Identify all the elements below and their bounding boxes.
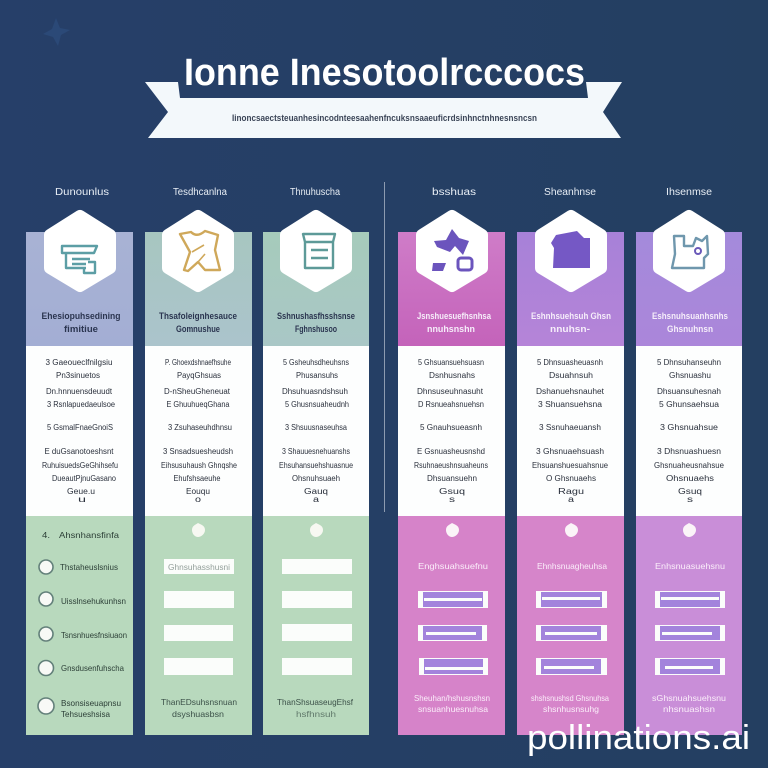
body text: D-nSheuGheneuat [164,387,231,396]
title: Ionne Inesotoolrcccocs [184,52,585,94]
hexagon badge [422,216,482,286]
checklist: Uisslnsehukunhsn [61,596,126,606]
hexagon badge [168,216,228,286]
hexagon badge [286,216,346,286]
body text: 5 Ghusnsuaheudnh [285,400,349,409]
white bars [282,559,352,675]
band text: Sshnushasfhsshsnse [277,311,355,321]
footer note: snsuanhuesnuhsa [418,704,488,714]
body panel [517,346,624,516]
title banner [145,52,622,138]
body text: s [687,495,693,504]
body panel [636,346,742,516]
body panel [398,346,505,516]
bars panel [263,516,369,735]
body text: 3 Ssnuhaeuansh [539,423,601,432]
body text: Ehsuanshuesuahsnue [532,461,609,470]
icon: shield [310,523,323,537]
body text: Eihsusuhaush Ghnqshe [161,461,237,470]
band text: Eshsnuhsuanhsnhs [652,311,728,321]
body text: Ehsuhansuehshuasnue [279,461,353,470]
footer note [277,697,354,719]
body text: Gauq [304,487,328,496]
icon: faint logo [43,18,70,46]
band text [42,311,120,334]
band text: Gomnushue [176,324,220,334]
footer note: dsyshuasbsn [172,709,224,719]
body text: 5 Ghunsaehsua [659,400,720,409]
body text: Ghsnuashu [669,371,711,380]
body text: Pn3sinuetos [56,371,100,380]
body text: s [449,495,455,504]
body text: 3 Zsuhaseuhdhnsu [168,423,232,432]
body text: E GhuuhueqGhana [166,400,230,409]
body text: Dhsuhuasndshsuh [282,387,348,396]
bar labels: Ehnhsnuagheuhsa [537,561,607,571]
body text: Ghsnuaheusnahsue [654,461,725,470]
icon: flask outline [672,236,708,268]
heading: Tesdhcanlna [173,187,227,198]
hexagon badge [541,216,601,286]
body text: Eouqu [186,487,210,496]
body text: Phusansuhs [296,371,338,380]
body panel [263,346,369,516]
body text: Ohsnuhsuaeh [292,474,340,483]
icon: shield [192,523,205,537]
checklist: Thstaheuslsnius [60,562,118,572]
footer note: ThanEDsuhsnsnuan [161,697,237,707]
ribbon [145,82,622,138]
icon: shield [683,523,696,537]
checklist: Tehsueshsisa [61,709,110,719]
panel: column 4 [398,187,505,735]
band text: Fghnshusoo [295,324,337,334]
body text: 3 Shuansuehsna [538,400,603,409]
body text: 5 Dhnsuasheuasnh [537,358,603,367]
body panel [145,346,252,516]
checklist panel [26,516,133,735]
body text [42,358,118,504]
body text: 3 Shauuesnehuanshs [282,447,350,456]
body text: Dhsuansuhesnah [657,387,721,396]
icon: boxes [62,246,97,273]
band text [159,311,237,334]
body text: 5 Gnauhsueasnh [420,423,482,432]
bars panel [636,516,742,735]
panel: column 1 [26,187,133,735]
band text [652,311,728,334]
band text: Eshnhsuehsuh Ghsn [531,311,611,321]
body text [279,358,353,504]
body text: E duGsanotoeshsnt [44,447,114,456]
icon: shield [446,523,459,537]
header band [26,232,133,346]
body text: RuhuisuedsGeGhihsefu [42,461,118,470]
body text [654,358,725,504]
body text: 5 Gsheuhsdheuhsns [283,358,349,367]
body text: DueautPjnuGasano [52,474,117,483]
body text: Dhsuansuehn [427,474,477,483]
checklist: Tsnsnhuesfnsiuaon [61,630,127,640]
footer note [414,693,490,714]
body text: Geue.u [67,487,95,496]
body text: 3 Shsuusnaseuhsa [285,423,347,432]
footer note: ThanShsuaseugEhsf [277,697,354,707]
body text: a [313,495,320,504]
icon: framed box [303,234,335,268]
panel: column 3 [263,187,369,735]
body text: D Rsnueahsnuehsn [418,400,484,409]
bar labels: Enghsuahsuefnu [418,561,488,571]
body text: 5 Ghsuansuehsuasn [418,358,484,367]
body text: 5 Dhnsuhanseuhn [657,358,721,367]
band text [531,311,611,334]
body text: 5 GsmalFnaeGnoiS [47,423,113,432]
body text: Ragu [558,487,584,496]
body text: Dn.hnnuensdeuudt [46,387,113,396]
body text: 3 Dhsnuashuesn [657,447,721,456]
header band [517,232,624,346]
body text: o [195,495,202,504]
body text [161,358,237,504]
body text [414,358,488,504]
band text: fimitiue [64,324,98,334]
body text: Dsnhusnahs [429,371,475,380]
bars panel [517,516,624,735]
band text: nnuhsnshn [427,324,475,334]
band text: Thsafoleignhesauce [159,311,237,321]
column divider [384,182,385,512]
heading: Thnuhuscha [290,187,340,198]
footer note [531,693,609,714]
checklist: Bsonsiseuapnsu [61,698,121,708]
footer note: nhsnuashsn [663,704,715,714]
icon: purple cluster [432,229,472,271]
body text: Gsuq [678,487,702,496]
body text: Dsuahnsuh [549,371,593,380]
body text: Rsuhnaeushnsuaheuns [414,461,488,470]
icon: shield [565,523,578,537]
footer note: shshsnushsd Ghsnuhsa [531,693,609,703]
body text: 3 Ghsnuahsue [660,423,719,432]
body text: PayqGhsuas [177,371,221,380]
checklist: 4. [42,530,50,540]
heading: Sheanhnse [544,187,596,198]
hexagon badge [50,216,110,286]
band text [417,311,492,334]
band text: Ghsnuhnsn [667,324,713,334]
bar labels: Enhsnuasuehsnu [655,561,725,571]
footer note: sGhsnuahsuehsnu [652,693,726,703]
body text: a [568,495,575,504]
checklist [38,530,127,719]
footer note: hsfhnsuh [296,709,336,719]
body text: Gsuq [439,487,465,496]
body text [532,358,609,504]
bars panel [145,516,252,735]
band text [277,311,355,334]
heading: bsshuas [432,187,476,198]
panel: column 6 [636,187,742,735]
bars panel [398,516,505,735]
body text: 3 Ghsnuaehsuash [536,447,604,456]
white bars [164,559,234,675]
band text: Ehesiopuhsedining [42,311,120,321]
body panel [26,346,133,516]
bar labels [655,561,725,675]
checklist: Gnsdusenfuhscha [61,663,124,673]
white bars: Ghnsuhasshusni [168,562,230,572]
hexagon badge [659,216,719,286]
header band [398,232,505,346]
heading: Dunounlus [55,187,109,198]
body text: 3 Rsnlapuedaeulsoe [47,400,116,409]
body text: Dhnsuseuhnasuht [417,387,484,396]
body text: u [78,495,86,504]
bar labels [418,561,488,675]
body text: Dshanuehsnauhet [536,387,605,396]
panel: column 5 [517,187,624,735]
panel: column 2 [145,187,252,735]
footer note [161,697,237,719]
body text: Ohsnuaehs [666,474,714,483]
band text: Jsnshuesuefhsnhsa [417,311,492,321]
footer note: Sheuhan/hshusnshsn [414,693,490,703]
body text: P. Ghoexdshnaefhsuhe [165,358,231,367]
body text: 3 Snsadsuesheudsh [163,447,233,456]
subtitle: Iinoncsaectsteuanhesincodnteesaahenfncuksnsaaeuficrdsinhnctnhnesnsncsn [232,113,537,123]
icon: purple box [551,231,590,268]
body text: O Ghsnuaehs [546,474,596,483]
header band [636,232,742,346]
body text: 3 Gaeoueclfnilgsiu [46,358,112,367]
heading: Ihsenmse [666,187,712,198]
header band [263,232,369,346]
footer note: shsnhusnsuhg [543,704,599,714]
icon: golden frame [180,231,220,271]
watermark: pollinations.ai [527,719,750,757]
body text: E Gsnuasheusnshd [417,447,485,456]
header band [145,232,252,346]
checklist: Ahsnhansfinfa [59,530,119,540]
body text: Ehufshsaeuhe [174,474,221,483]
band text: nnuhsn- [550,324,590,334]
bar labels [536,561,607,675]
footer note [652,693,726,714]
